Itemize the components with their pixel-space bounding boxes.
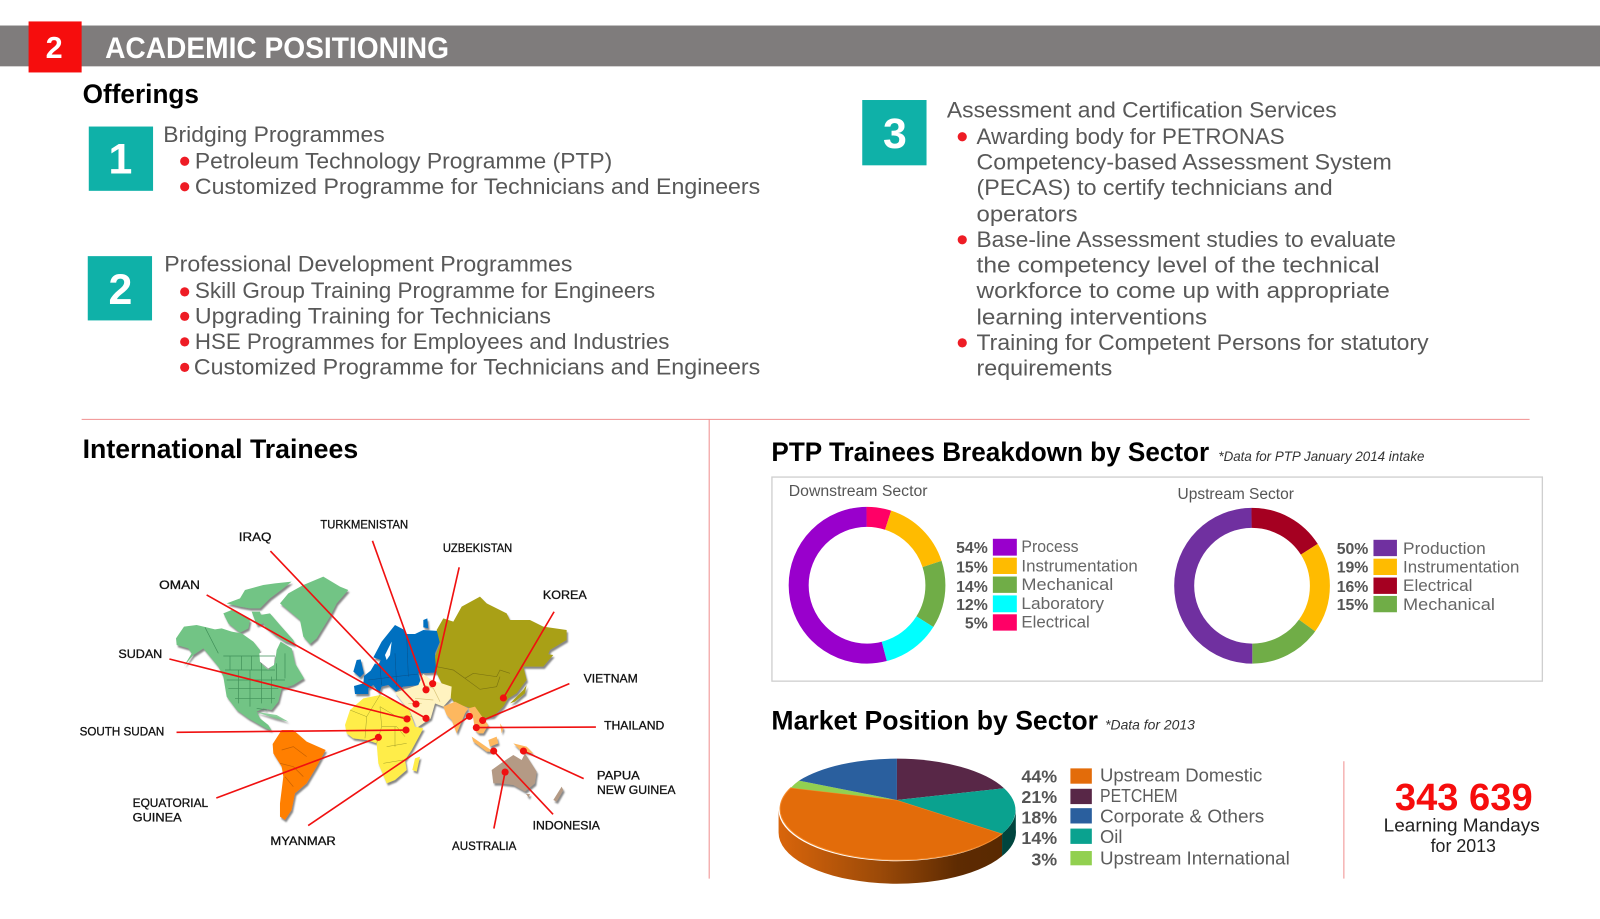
line: Iraq xyxy=(270,551,420,708)
africa xyxy=(345,695,423,783)
heading: Offerings: Offerings xyxy=(83,79,199,109)
line: Australia xyxy=(494,768,509,829)
downstream legend: Mechanical xyxy=(1021,575,1113,594)
line: Indonesia xyxy=(490,747,553,814)
line: Equatorial Guinea xyxy=(216,734,382,798)
south america xyxy=(273,730,326,820)
pie legend: 3% xyxy=(1031,849,1057,869)
eurasia africa and oceania xyxy=(345,597,567,802)
text block: Assessment and Certification Services: the competency level of the technical xyxy=(977,252,1380,277)
europe xyxy=(353,618,440,694)
pie legend: 44% xyxy=(1021,767,1057,787)
downstream legend: Process xyxy=(1021,537,1079,556)
text block: Professional Development Programmes xyxy=(164,251,760,380)
country labels: SOUTH SUDAN xyxy=(80,725,164,739)
text block: Assessment and Certification Services: learning interventions xyxy=(977,305,1207,330)
panel: offering 1 xyxy=(89,122,760,199)
text block: Assessment and Certification Services: requirements xyxy=(977,356,1112,381)
pie legend: Oil xyxy=(1100,826,1122,847)
country labels: GUINEA xyxy=(133,810,182,824)
badge 1 xyxy=(89,127,153,191)
section number badge xyxy=(29,21,82,72)
pie legend: Upstream Domestic xyxy=(1100,765,1262,786)
world map xyxy=(176,577,567,820)
india and south east asia xyxy=(443,702,533,753)
upstream legend xyxy=(1337,539,1519,614)
pie legend xyxy=(1021,765,1290,869)
pie legend: Upstream International xyxy=(1100,847,1290,868)
country labels: IRAQ xyxy=(239,530,271,544)
badge 1: 1 xyxy=(108,135,132,183)
panel: sector breakdown xyxy=(772,477,1542,681)
country labels: SUDAN xyxy=(118,647,162,661)
country labels: NEW GUINEA xyxy=(597,783,676,797)
3D pie chart xyxy=(779,759,1016,884)
text block: Professional Development Programmes: Skill Group Training Programme for Engineers xyxy=(195,278,655,303)
line: Turkmenistan xyxy=(372,541,430,693)
country labels: PAPUA xyxy=(597,769,641,783)
text block: Professional Development Programmes: Upgrading Training for Technicians xyxy=(195,303,551,328)
section number badge: 2 xyxy=(46,31,63,65)
line: Papua New Guinea xyxy=(520,747,584,779)
text block: Bridging Programmes xyxy=(163,122,760,199)
downstream legend: 12% xyxy=(956,597,988,614)
callout: learning mandays: Learning Mandays xyxy=(1384,815,1540,836)
country labels: THAILAND xyxy=(604,719,664,733)
panel: offering 2 xyxy=(88,251,760,380)
text block: Assessment and Certification Services: Awarding body for PETRONAS xyxy=(977,124,1285,149)
country labels: KOREA xyxy=(543,588,588,602)
country labels: AUSTRALIA xyxy=(452,839,517,853)
text block: Assessment and Certification Services: (PECAS) to certify technicians and xyxy=(977,175,1333,200)
header bar xyxy=(0,21,1600,72)
text block: Bridging Programmes: Petroleum Technology Programme (PTP) xyxy=(195,148,612,173)
downstream legend: Instrumentation xyxy=(1021,556,1138,575)
callout: learning mandays xyxy=(1384,776,1540,856)
text block: Assessment and Certification Services xyxy=(947,97,1429,381)
callout: learning mandays: for 2013 xyxy=(1431,835,1496,856)
upstream donut chart xyxy=(1178,486,1320,654)
line: South Sudan xyxy=(177,726,410,734)
text block: Bridging Programmes: Bridging Programmes xyxy=(163,122,385,147)
middle east xyxy=(395,674,452,727)
upstream legend: Mechanical xyxy=(1403,595,1495,614)
heading: Market Position: *Data for 2013 xyxy=(1105,718,1195,733)
text block: Bridging Programmes: Customized Programme for Technicians and Engineers xyxy=(195,174,760,199)
downstream legend: 54% xyxy=(956,540,988,557)
downstream legend xyxy=(956,537,1138,633)
upstream legend: 16% xyxy=(1337,579,1368,596)
downstream donut chart: Downstream Sector xyxy=(789,483,928,500)
title: ACADEMIC POSITIONING xyxy=(105,32,449,65)
country labels: UZBEKISTAN xyxy=(443,541,512,555)
downstream legend: Electrical xyxy=(1021,613,1090,632)
line: Sudan xyxy=(169,659,411,723)
text block: Assessment and Certification Services: Base-line Assessment studies to evaluate xyxy=(977,227,1396,252)
americas xyxy=(176,577,348,820)
upstream legend: Electrical xyxy=(1403,576,1472,595)
text block: Assessment and Certification Services: Assessment and Certification Services xyxy=(947,97,1337,122)
line: Oman xyxy=(207,595,430,722)
text block: Assessment and Certification Services: Competency-based Assessment System xyxy=(977,149,1392,174)
badge 2 xyxy=(88,256,152,320)
country labels: MYANMAR xyxy=(270,834,336,848)
australia xyxy=(492,753,563,802)
line: Thailand xyxy=(473,724,596,731)
heading: PTP Trainees Breakdown: *Data for PTP January 2014 intake xyxy=(1218,449,1425,464)
badge 2: 2 xyxy=(108,266,132,314)
downstream legend: 14% xyxy=(956,579,988,596)
line: Korea xyxy=(500,612,554,702)
country labels: VIETNAM xyxy=(584,672,638,686)
badge 3 xyxy=(862,100,927,165)
text block: Assessment and Certification Services: workforce to come up with appropriate xyxy=(975,278,1390,303)
upstream legend: 50% xyxy=(1337,541,1368,558)
country labels: INDONESIA xyxy=(533,819,601,833)
text block: Professional Development Programmes: Customized Programme for Technicians and Engineers xyxy=(194,355,760,380)
text block: Professional Development Programmes: HSE Programmes for Employees and Industries xyxy=(195,329,669,354)
badge 3: 3 xyxy=(883,110,907,158)
pie legend: Corporate & Others xyxy=(1100,805,1264,826)
text block: Professional Development Programmes: Professional Development Programmes xyxy=(164,251,572,276)
upstream legend: Instrumentation xyxy=(1403,557,1519,576)
pie legend: 21% xyxy=(1021,787,1057,807)
heading: Market Position: Market Position by Sector xyxy=(771,706,1098,736)
text block: Assessment and Certification Services: Training for Competent Persons for statutory xyxy=(977,330,1429,355)
downstream donut chart xyxy=(789,483,935,654)
upstream legend: 19% xyxy=(1337,559,1368,576)
heading: PTP Trainees Breakdown: PTP Trainees Breakdown by Sector xyxy=(771,437,1209,467)
line: Myanmar xyxy=(308,713,473,826)
downstream legend: 15% xyxy=(956,559,988,576)
upstream legend: Production xyxy=(1403,539,1486,558)
downstream legend: 5% xyxy=(965,616,988,633)
upstream donut chart: Upstream Sector xyxy=(1178,486,1294,503)
country labels: OMAN xyxy=(159,578,200,592)
pie legend: PETCHEM xyxy=(1100,785,1178,806)
country labels xyxy=(80,518,676,853)
country leader lines xyxy=(169,541,596,829)
pie legend: 18% xyxy=(1021,807,1057,827)
asia xyxy=(435,597,567,718)
panel: offering 3 xyxy=(862,97,1429,381)
heading: International Trainees: International Trainees xyxy=(83,434,358,464)
pie legend: 14% xyxy=(1021,828,1057,848)
country labels: EQUATORIAL xyxy=(133,796,208,810)
upstream legend: 15% xyxy=(1337,597,1368,614)
text block: Assessment and Certification Services: operators xyxy=(977,201,1078,226)
heading: PTP Trainees Breakdown xyxy=(771,437,1425,467)
line: Vietnam xyxy=(479,684,569,724)
callout: learning mandays: 343 639 xyxy=(1395,776,1533,818)
downstream legend: Laboratory xyxy=(1021,594,1105,613)
country labels: TURKMENISTAN xyxy=(320,518,408,532)
line: Uzbekistan xyxy=(429,567,459,687)
